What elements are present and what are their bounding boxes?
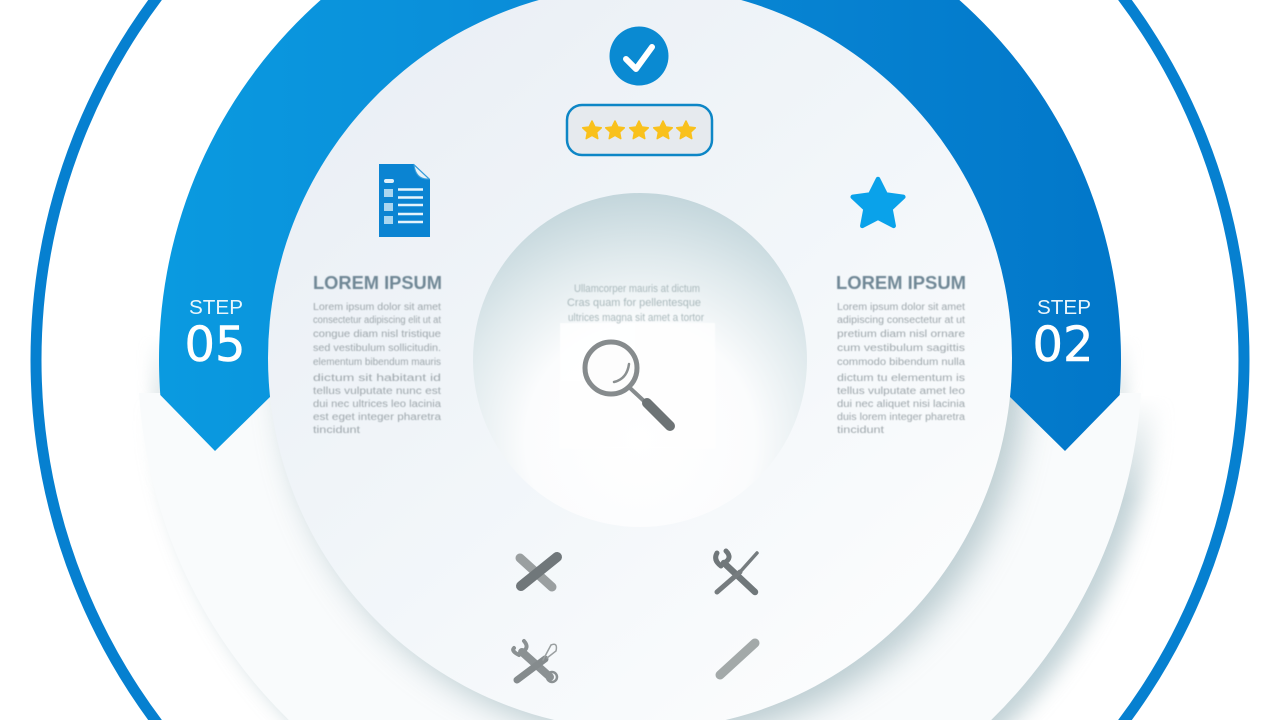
right body: Lorem ipsum dolor sit amet [837,302,965,313]
right text block [836,273,966,436]
right body [837,302,966,436]
left body: consectetur adipiscing elit ut at [313,315,441,326]
centre text: Cras quam for pellentesque [567,297,701,309]
left body: tellus vulputate nunc est [313,386,441,397]
icon: document [379,164,430,237]
blue band with arrows [159,0,1121,451]
icon: check badge [610,26,668,86]
left body: dictum sit habitant id [313,373,441,384]
right body: commodo bibendum nulla [837,357,965,368]
centre text: Ullamcorper mauris at dictum [574,283,700,295]
disk shadow [266,397,1039,720]
right body: duis lorem integer pharetra [837,412,965,423]
right body: tellus vulputate amet leo [837,386,966,397]
centre text [567,283,704,324]
right heading: LOREM IPSUM [836,273,966,293]
right body: tincidunt [837,425,884,436]
step 05 label: STEP [189,297,243,319]
icon: crossed tools [513,641,557,682]
left heading: LOREM IPSUM [313,273,442,293]
left text block [313,273,442,436]
lower white sector [139,393,1141,720]
rating box [567,105,712,155]
left body: congue diam nisl tristique [313,329,441,340]
right body: dictum tu elementum is [837,373,965,384]
shadow of lower sector [160,410,1157,720]
main disk [268,0,1012,720]
soft panel behind magnifier [560,324,714,336]
step 05 label: 05 [184,317,246,373]
left body [313,302,442,436]
icon: magnifier [585,342,670,426]
left body: sed vestibulum sollicitudin. [313,343,441,354]
step 02 label: STEP [1037,297,1091,319]
centre hole [473,193,807,527]
icon: single bar [720,643,755,675]
left body: elementum bibendum mauris [313,357,441,368]
right body: pretium diam nisl ornare [837,329,966,340]
left body: dui nec ultrices leo lacinia [313,399,441,410]
right body: dui nec aliquet nisi lacinia [837,399,965,410]
left body: tincidunt [313,425,360,436]
icon: crossed bars [520,557,557,587]
soft shadow beside band ends [147,354,1133,393]
rating stars [583,121,695,139]
icon: star [853,179,903,226]
right body: adipiscing consectetur at ut [837,315,965,326]
right body: cum vestibulum sagittis [837,343,965,354]
icon: wrench and screwdriver [716,551,757,592]
centre text: ultrices magna sit amet a tortor [568,312,704,324]
step 02 label: 02 [1032,317,1094,373]
left body: est eget integer pharetra [313,412,442,423]
left body: Lorem ipsum dolor sit amet [313,302,441,313]
